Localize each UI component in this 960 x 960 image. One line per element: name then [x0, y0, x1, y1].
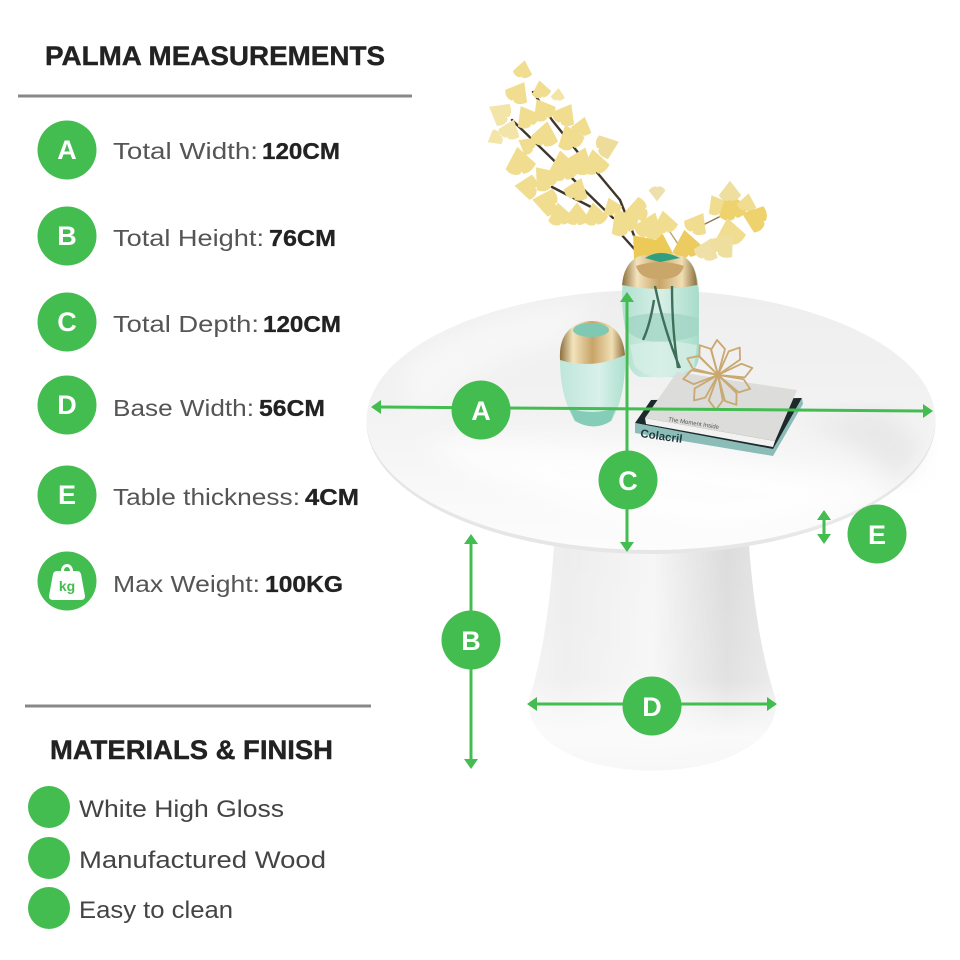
row E: table thickness: Table thickness:	[113, 484, 300, 510]
tall glass vase	[622, 253, 699, 378]
material: easy to clean	[28, 887, 233, 929]
heading: materials and finish: MATERIALS & FINISH	[50, 735, 333, 765]
row C: total depth: Total Depth:	[113, 311, 259, 337]
dimension arrow A	[371, 380, 933, 440]
stacked books	[635, 372, 803, 456]
row D: base width	[38, 376, 325, 434]
material: manufactured wood: Manufactured Wood	[79, 847, 326, 874]
gold star ornament	[683, 340, 754, 410]
table top	[366, 290, 936, 554]
row: max weight	[38, 552, 343, 610]
row C: total depth: 120CM	[263, 311, 341, 337]
row: max weight: 100KG	[265, 571, 343, 597]
dimension arrow D: D	[642, 692, 662, 722]
row E: table thickness: E	[58, 480, 76, 510]
dimension arrow B	[442, 534, 500, 769]
row A: total width: Total Width:	[113, 138, 258, 164]
row E: table thickness: 4CM	[305, 484, 359, 510]
dimension arrow C: C	[618, 466, 638, 496]
dimension arrow C	[598, 292, 658, 552]
row: max weight: Max Weight:	[113, 571, 260, 597]
dimension arrow E: E	[868, 520, 886, 550]
table base	[529, 545, 776, 770]
row B: total height: 76CM	[269, 225, 336, 251]
row D: base width: D	[57, 390, 77, 420]
material: white high gloss	[28, 786, 284, 828]
stacked books: The Moment Inside	[668, 417, 720, 431]
row D: base width: 56CM	[259, 395, 325, 421]
row A: total width	[38, 120, 340, 180]
dimension arrow A: A	[471, 396, 491, 426]
material: white high gloss: White High Gloss	[79, 796, 284, 823]
dimension arrow D	[527, 676, 777, 736]
table illustration	[366, 59, 936, 770]
heading: palma measurements: PALMA MEASUREMENTS	[45, 41, 385, 71]
material: easy to clean: Easy to clean	[79, 897, 233, 924]
small teal vase	[560, 321, 625, 426]
row C: total depth: C	[57, 307, 77, 337]
materials list	[28, 786, 326, 929]
row A: total width: A	[57, 135, 77, 165]
icon: weight bag: kg	[59, 578, 75, 594]
measurement list	[38, 120, 359, 610]
row E: table thickness	[38, 466, 359, 524]
row B: total height	[38, 206, 336, 266]
row C: total depth	[38, 292, 341, 352]
dimension arrow B: B	[461, 626, 481, 656]
row D: base width: Base Width:	[113, 395, 254, 421]
material: manufactured wood	[28, 837, 326, 879]
row B: total height: Total Height:	[113, 225, 264, 251]
row A: total width: 120CM	[262, 138, 340, 164]
flower branches	[483, 59, 770, 266]
icon: weight bag	[49, 564, 85, 600]
book title: Colacril	[640, 428, 683, 446]
dimension arrow E	[817, 504, 906, 564]
row B: total height: B	[57, 221, 77, 251]
